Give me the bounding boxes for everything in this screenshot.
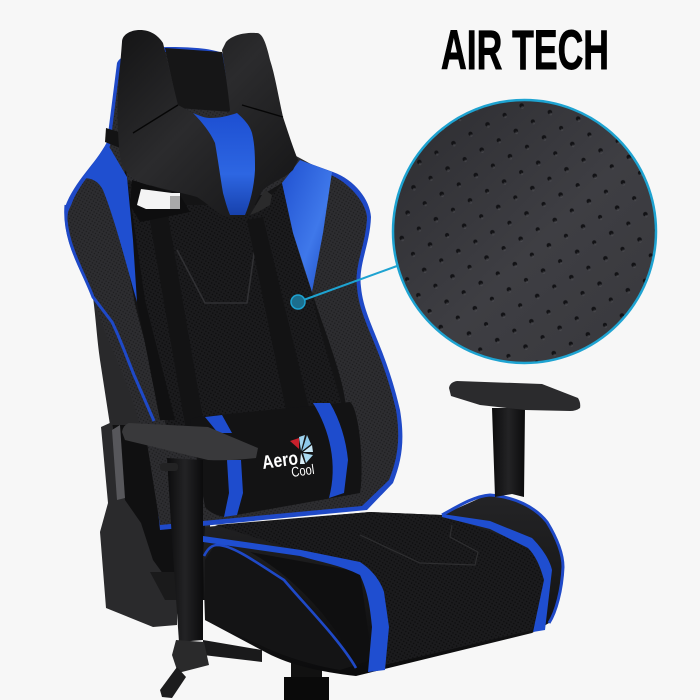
title: AIR TECH <box>441 18 609 81</box>
left arm pad <box>122 423 258 460</box>
seat cushion <box>203 495 563 676</box>
lumbar left band lower <box>224 460 243 517</box>
headrest seam lines <box>133 105 283 133</box>
seat right blue strip <box>442 514 552 632</box>
headrest blue stripe <box>193 113 255 215</box>
lumbar left band upper <box>205 415 232 433</box>
headrest pillow <box>117 30 298 217</box>
headrest frame opening <box>130 180 272 222</box>
seat embossed outline <box>360 525 478 565</box>
magnified leather texture circle <box>390 98 660 368</box>
icon: logo fan <box>290 435 313 464</box>
side mechanism <box>100 422 205 627</box>
backrest centre embossing <box>177 247 255 303</box>
chair illustration <box>65 30 580 700</box>
logo wordmark Cool: Cool <box>290 461 315 480</box>
pedestal <box>203 640 329 700</box>
headrest back panel <box>165 48 232 112</box>
lumbar pillow <box>190 402 362 517</box>
lumbar right band <box>313 403 348 498</box>
lumbar logo <box>261 435 315 480</box>
backrest shell <box>65 47 402 530</box>
left blue shoulder panel <box>83 143 137 302</box>
right armrest <box>449 381 580 497</box>
seat front blue strip <box>203 536 389 672</box>
left backrest piping <box>66 205 154 421</box>
callout anchor dot <box>291 295 305 309</box>
left arm lower bracket <box>172 640 209 673</box>
right arm post <box>492 408 525 497</box>
left arm post <box>167 458 203 642</box>
logo wordmark Aero: Aero <box>261 448 299 474</box>
left arm knob <box>160 463 178 471</box>
left arm caster foot <box>160 667 186 698</box>
harness straps <box>105 128 312 430</box>
seat piping <box>204 545 356 668</box>
right blue shoulder panel <box>282 160 332 292</box>
backrest outer side shell <box>65 215 210 545</box>
left armrest <box>122 423 258 698</box>
right arm pad <box>449 381 580 411</box>
callout leader line <box>298 266 397 302</box>
